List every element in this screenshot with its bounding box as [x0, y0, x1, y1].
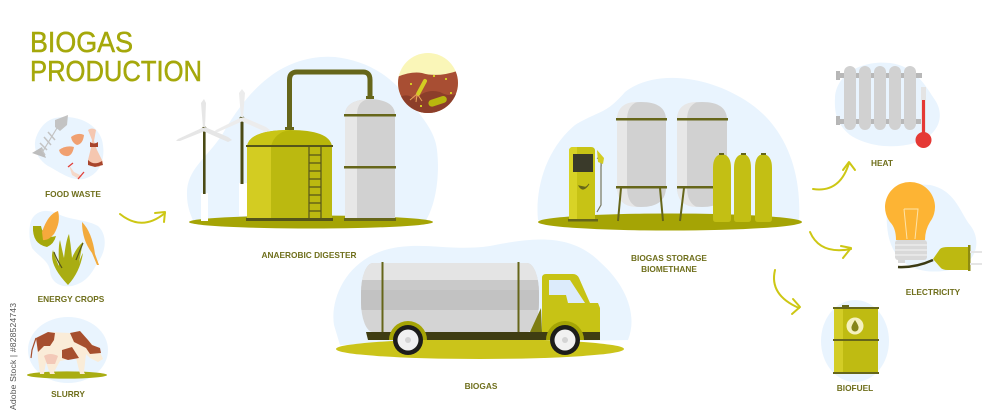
storage tanks	[616, 102, 728, 221]
gas tower	[344, 99, 396, 221]
plug	[898, 245, 982, 271]
label: biogas storage biomethane: BIOGAS STORAGE	[631, 253, 707, 263]
wind turbines	[176, 89, 270, 221]
arrow: electricity	[810, 232, 851, 258]
digester tank	[246, 130, 333, 221]
label: energy crops: ENERGY CROPS	[38, 294, 105, 304]
chassis	[366, 332, 600, 340]
radiator	[836, 66, 922, 130]
barrel	[833, 305, 879, 374]
label: biofuel: BIOFUEL	[837, 383, 873, 393]
panel: biofuel	[821, 300, 889, 382]
stock id: Adobe Stock | #828524743	[8, 303, 18, 410]
label: heat: HEAT	[871, 158, 893, 168]
ground	[336, 339, 624, 359]
label: food waste: FOOD WASTE	[45, 189, 101, 199]
title	[30, 27, 202, 88]
label: biogas: BIOGAS	[465, 381, 498, 391]
label: electricity: ELECTRICITY	[906, 287, 961, 297]
panel: energy crops	[29, 211, 105, 286]
panel: electricity	[885, 182, 982, 272]
light bulb	[885, 182, 935, 261]
tank	[361, 262, 539, 333]
panel: food waste	[32, 115, 103, 179]
label: anaerobic digester: ANAEROBIC DIGESTER	[262, 250, 356, 260]
panel: heat	[835, 63, 940, 148]
gas cylinders	[713, 153, 772, 222]
fuel pump	[568, 147, 604, 222]
title: PRODUCTION	[30, 56, 202, 88]
arrow: heat	[813, 162, 855, 189]
panel: storage	[537, 78, 802, 230]
microbes circle	[398, 53, 458, 113]
ground	[189, 216, 433, 228]
arrow: inputs to digester	[120, 212, 165, 223]
thermometer	[916, 87, 932, 148]
ground	[538, 214, 802, 230]
panel: anaerobic digester	[176, 53, 460, 228]
title: BIOGAS	[30, 27, 133, 59]
panel: slurry cow	[27, 317, 108, 383]
pipe	[290, 72, 370, 128]
panel: biogas truck	[333, 239, 632, 359]
wheels	[389, 321, 584, 355]
cab	[530, 274, 600, 332]
label: biogas storage biomethane: BIOMETHANE	[641, 264, 697, 274]
label: slurry: SLURRY	[51, 389, 85, 399]
label: biogas storage biomethane	[631, 253, 707, 274]
arrow: biofuel	[774, 270, 800, 314]
